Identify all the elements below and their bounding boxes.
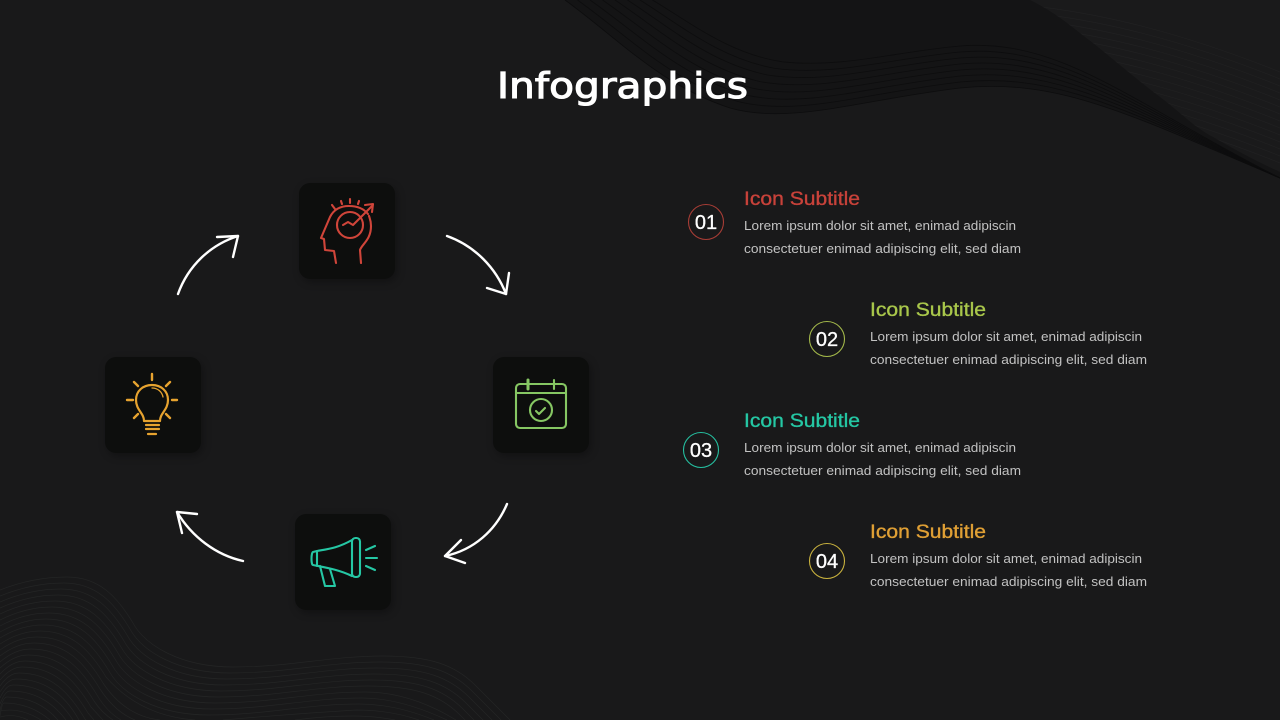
text block 01: Icon Subtitle <box>744 189 860 210</box>
icon: calendar with check <box>516 380 566 428</box>
text block 04 <box>870 522 1147 589</box>
arrow: bottom right <box>445 504 507 563</box>
badge 02: 02 <box>816 329 838 351</box>
card: head icon <box>299 183 395 279</box>
text block 03: Lorem ipsum dolor sit amet, enimad adipiscin <box>744 440 1016 455</box>
text block 03 <box>744 411 1021 478</box>
card: calendar icon <box>493 357 589 453</box>
item 04 <box>810 522 1147 589</box>
item 01 <box>688 189 1021 256</box>
text block 03: consectetuer enimad adipiscing elit, sed diam <box>744 463 1021 478</box>
text block 01 <box>744 189 1021 256</box>
card: light bulb icon <box>105 357 201 453</box>
badge 03 <box>684 432 718 468</box>
cycle diagram <box>105 183 589 610</box>
badge 01: 01 <box>695 212 717 234</box>
text block 02 <box>870 300 1147 367</box>
text block 01: Lorem ipsum dolor sit amet, enimad adipiscin <box>744 218 1016 233</box>
text block 02: consectetuer enimad adipiscing elit, sed diam <box>870 352 1147 367</box>
text block 04: Icon Subtitle <box>870 522 986 543</box>
card: megaphone icon <box>295 514 391 610</box>
text block 01: consectetuer enimad adipiscing elit, sed diam <box>744 241 1021 256</box>
arrow: top left <box>178 236 238 294</box>
badge 03: 03 <box>690 440 712 462</box>
text block 03: Icon Subtitle <box>744 411 860 432</box>
arrow: bottom left <box>177 512 243 561</box>
badge 01 <box>688 204 724 240</box>
text block 04: Lorem ipsum dolor sit amet, enimad adipiscin <box>870 551 1142 566</box>
badge 04 <box>810 544 844 578</box>
text block 04: consectetuer enimad adipiscing elit, sed diam <box>870 574 1147 589</box>
arrow: top right <box>447 236 509 294</box>
item 03 <box>684 411 1021 478</box>
badge 04: 04 <box>816 551 838 573</box>
icon: megaphone <box>312 538 377 586</box>
badge 02 <box>810 322 844 356</box>
text block 02: Icon Subtitle <box>870 300 986 321</box>
item 02 <box>810 300 1147 367</box>
title: Infographics <box>497 66 748 107</box>
icon: head with growth chart <box>321 199 373 263</box>
icon: light bulb <box>127 374 177 434</box>
text block 02: Lorem ipsum dolor sit amet, enimad adipiscin <box>870 329 1142 344</box>
